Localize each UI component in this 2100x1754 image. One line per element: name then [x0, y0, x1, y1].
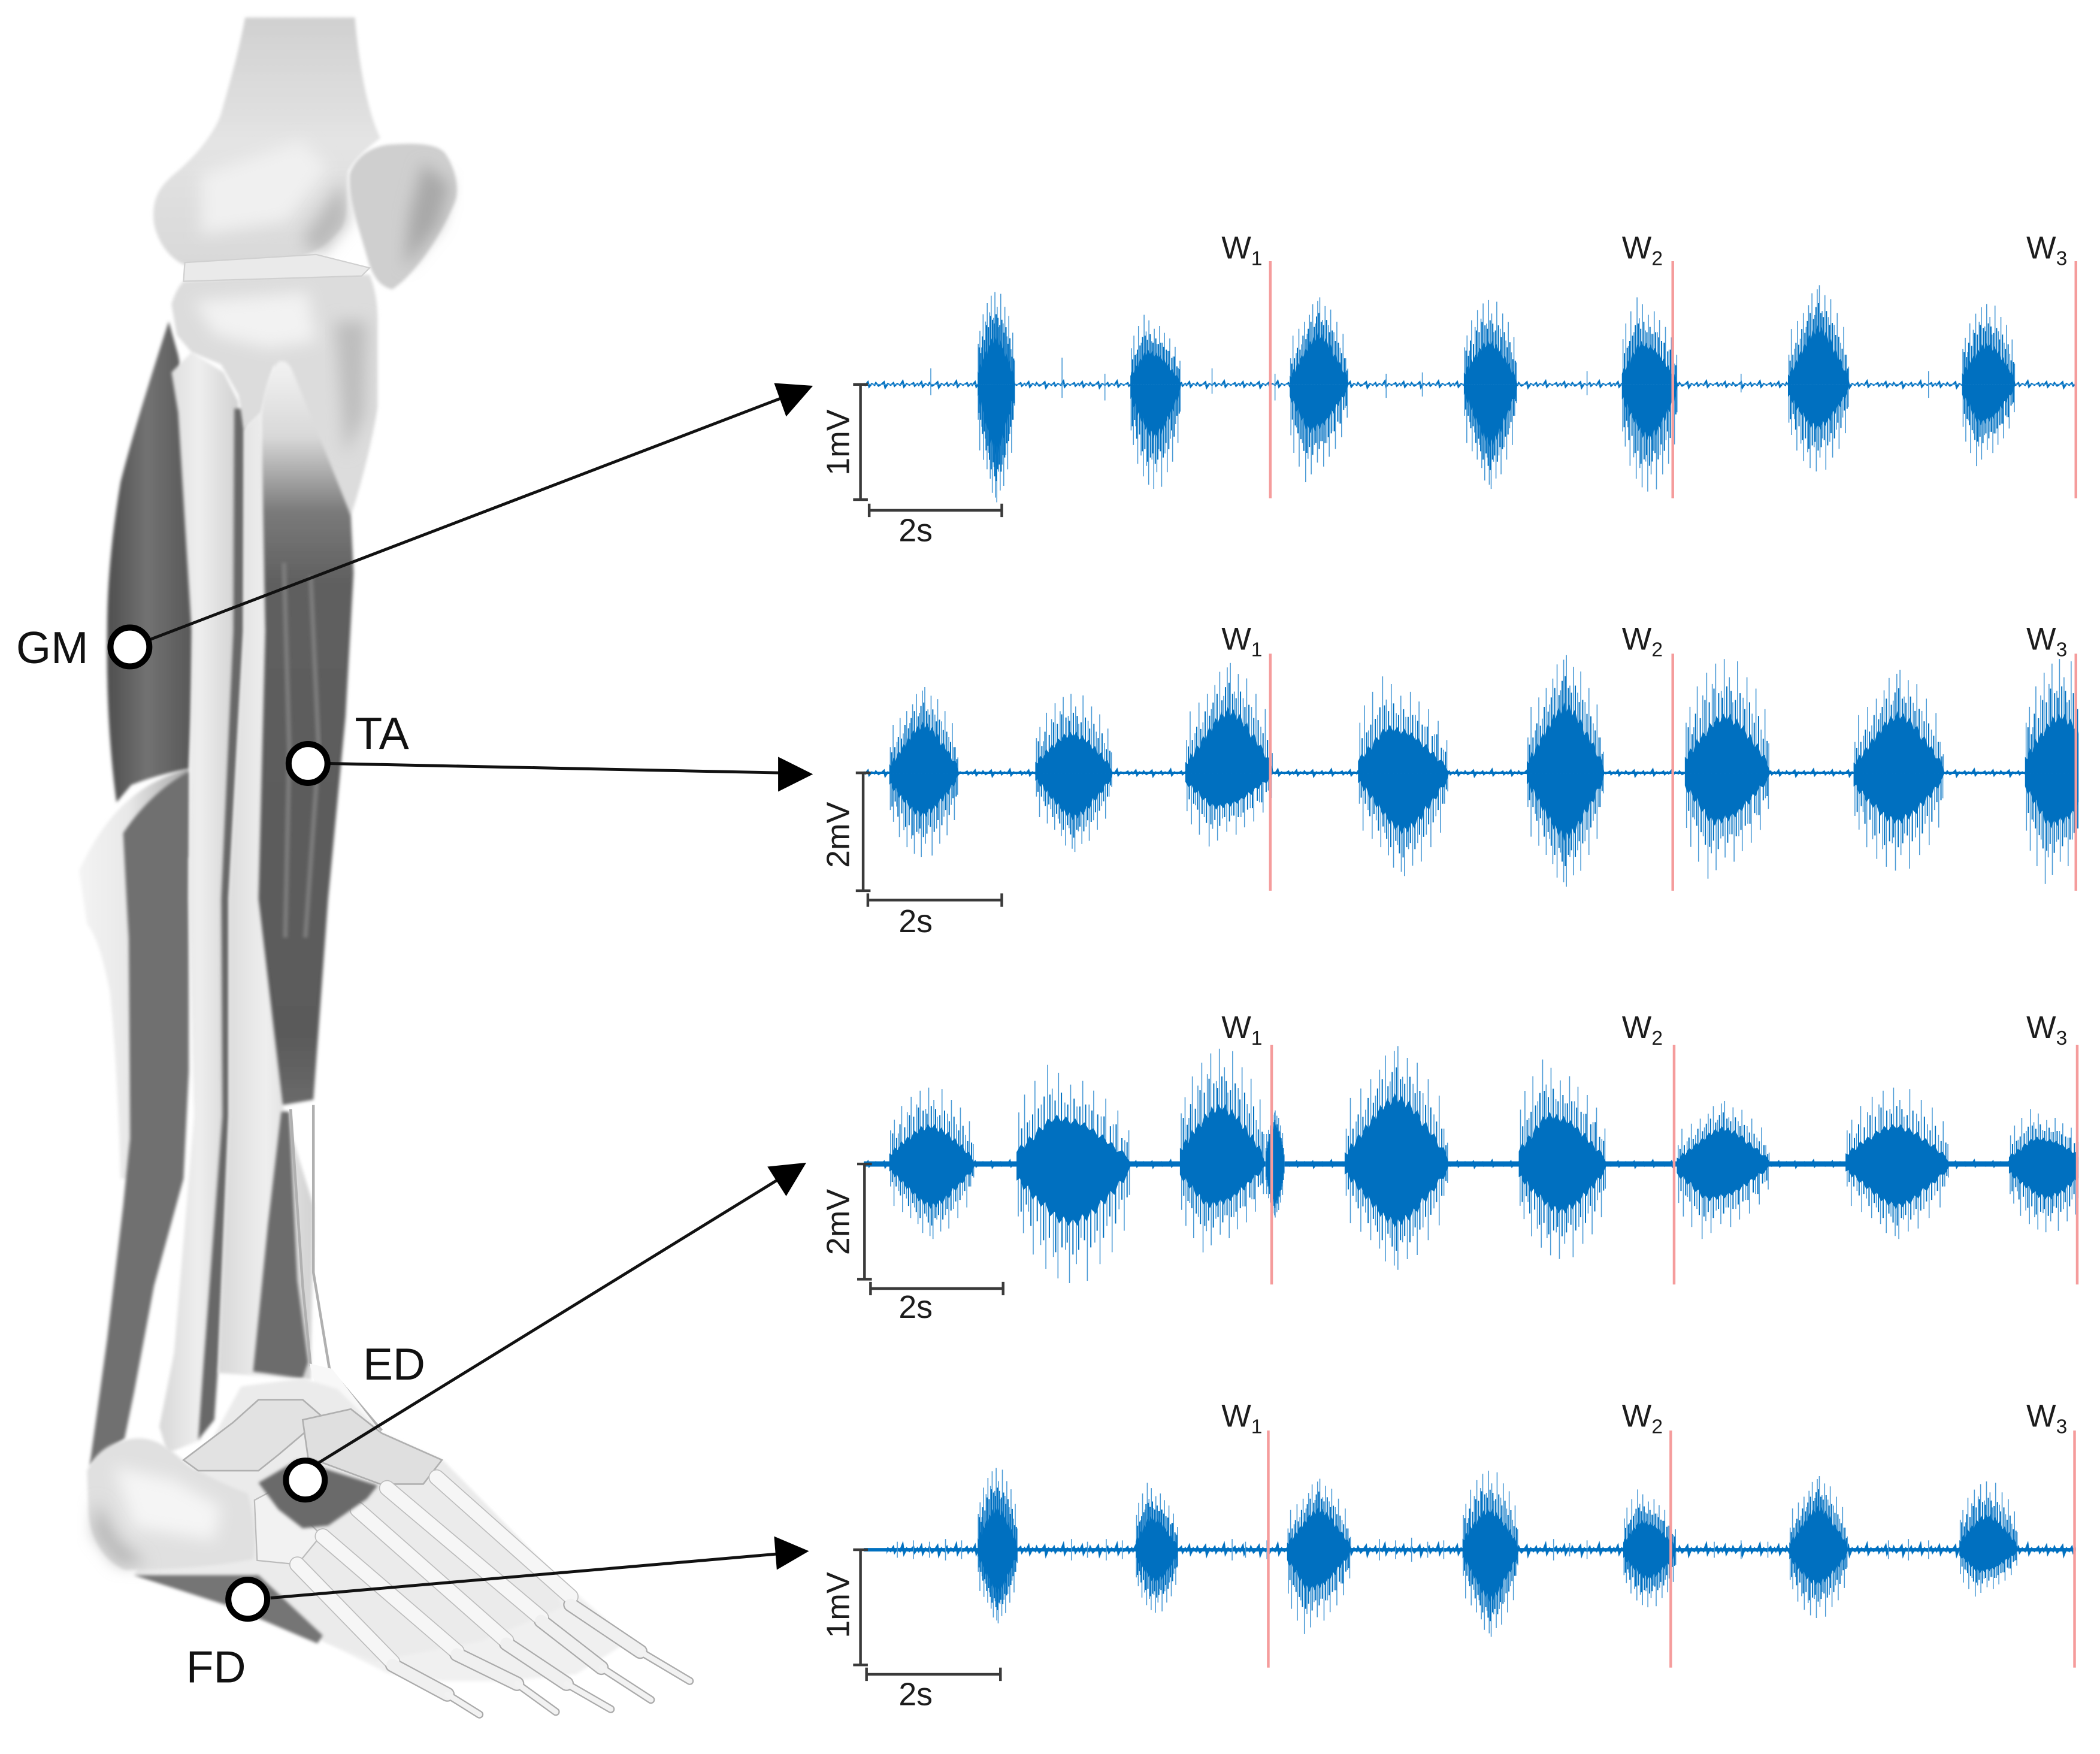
soleus and Achilles tendon — [90, 772, 189, 1465]
window markers: row 4: 2 — [1651, 1416, 1663, 1438]
window markers: row 1 — [1221, 231, 2076, 498]
talus — [183, 1400, 323, 1471]
lower calf band — [79, 769, 189, 1179]
label: TA: TA — [355, 708, 409, 758]
label: ED: ED — [363, 1339, 425, 1389]
scale bars: row 4 — [821, 1550, 1000, 1712]
extensor muscle near ankle — [253, 1112, 308, 1378]
electrode marker: ED — [286, 1460, 325, 1499]
label: GM: GM — [16, 622, 88, 673]
window markers: row 3 — [1221, 1010, 2077, 1284]
patella — [349, 144, 457, 289]
EMG trace: FD, 1mV — [864, 1468, 2076, 1637]
window markers: row 2: W — [1622, 621, 1651, 657]
label: FD: FD — [186, 1641, 246, 1692]
window markers: row 1: 3 — [2056, 248, 2067, 270]
window markers: row 2: 1 — [1251, 639, 1262, 661]
phalanges and metatarsals outlines — [297, 1477, 571, 1662]
scale bars: row 3: 2s — [898, 1289, 933, 1325]
window markers: row 4 — [1221, 1398, 2075, 1668]
tibialis anterior muscle — [259, 361, 353, 1105]
window markers: row 4: W — [2026, 1398, 2056, 1434]
window markers: row 2: 3 — [2056, 639, 2067, 661]
window markers: row 4: 1 — [1251, 1416, 1262, 1438]
illustration: leg and foot anatomy — [79, 17, 690, 1714]
calcaneus heel bone — [87, 1438, 255, 1570]
arrow: GM to trace — [144, 383, 813, 642]
window markers: row 3: 1 — [1251, 1027, 1262, 1050]
electrode marker: FD — [228, 1580, 267, 1619]
window markers: row 3: W — [1622, 1010, 1651, 1045]
scale bars: row 2: 2s — [898, 903, 933, 939]
window markers: row 4: 3 — [2056, 1416, 2067, 1438]
gastrocnemius medialis muscle — [107, 322, 195, 802]
tibialis tendon — [291, 1105, 382, 1431]
EMG trace: ED, 2mV — [864, 1046, 2089, 1283]
scale bars: row 1: 2s — [898, 512, 933, 548]
window markers: row 1: W — [1221, 231, 1251, 266]
window markers: row 2: W — [2026, 621, 2056, 657]
tibia head — [171, 274, 378, 516]
window markers: row 1: 2 — [1651, 248, 1663, 270]
fibula — [159, 352, 238, 1453]
arrow: ED to trace — [319, 1163, 806, 1463]
window markers: row 3: 2 — [1651, 1027, 1663, 1050]
scale bars: row 1: 1mV — [821, 409, 857, 476]
window markers: row 3: W — [2026, 1010, 2056, 1045]
window markers: row 2 — [1221, 621, 2076, 891]
window markers: row 2: W — [1221, 621, 1251, 657]
EMG trace: TA, 2mV — [864, 655, 2100, 887]
window markers: row 1: W — [1622, 231, 1651, 266]
scale bars: row 1 — [821, 385, 1002, 548]
window markers: row 1: W — [2026, 231, 2056, 266]
tarsal bones — [302, 1409, 442, 1484]
window markers: row 4: W — [1221, 1398, 1251, 1434]
interosseous strip — [198, 409, 245, 1440]
electrode marker: TA — [289, 744, 328, 783]
electrode marker: GM — [110, 628, 149, 666]
arrow: TA to trace — [329, 757, 813, 791]
window markers: row 2: 2 — [1651, 639, 1663, 661]
scale bars: row 4: 2s — [898, 1676, 933, 1712]
scale bars: row 3 — [821, 1164, 1003, 1325]
femur — [153, 17, 380, 267]
scale bars: row 2: 2mV — [821, 802, 857, 868]
meniscus — [183, 255, 370, 282]
window markers: row 4: W — [1622, 1398, 1651, 1434]
extensor digitorum muscle — [259, 1460, 378, 1528]
forefoot fill — [323, 1460, 630, 1681]
scale bars: row 2 — [821, 773, 1002, 939]
scale bars: row 3: 2mV — [821, 1189, 857, 1255]
window markers: row 1: 1 — [1251, 248, 1262, 270]
flexor digitorum muscle — [134, 1575, 323, 1644]
window markers: row 3: 3 — [2056, 1027, 2067, 1050]
foot silhouette — [134, 1378, 562, 1661]
scale bars: row 4: 1mV — [821, 1572, 857, 1638]
EMG trace: GM, 1mV — [864, 285, 2076, 502]
phalanges and metatarsals fill — [297, 1477, 571, 1662]
window markers: row 3: W — [1221, 1010, 1251, 1045]
tibia shaft — [218, 413, 313, 1380]
arrow: FD to trace — [271, 1537, 809, 1598]
